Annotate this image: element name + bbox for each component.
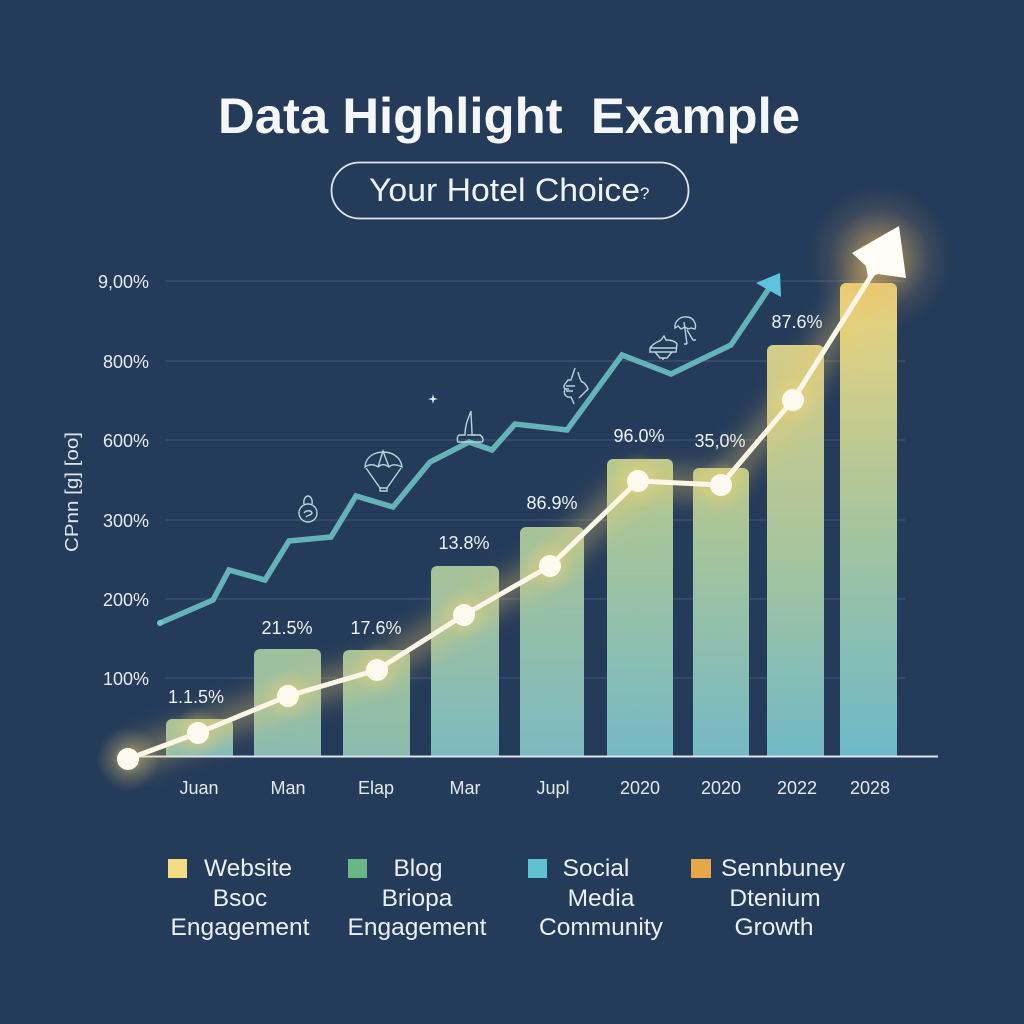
data points bbox=[117, 389, 804, 770]
legend: blog: Briopa bbox=[382, 885, 453, 912]
legend: website: Engagement bbox=[171, 914, 310, 941]
value labels: 13.8% bbox=[438, 533, 490, 553]
value labels: 96.0% bbox=[613, 426, 665, 446]
icon: rocket bbox=[457, 411, 483, 442]
teal line with arrow bbox=[157, 273, 781, 626]
icon: money bag bbox=[299, 496, 317, 522]
value labels bbox=[168, 312, 823, 707]
bar 5 bbox=[520, 527, 584, 756]
white growth line with arrow bbox=[128, 226, 906, 759]
line icons bbox=[299, 317, 696, 522]
legend: website bbox=[168, 855, 310, 941]
x axis labels: Mar bbox=[450, 778, 481, 798]
legend: blog bbox=[348, 855, 487, 941]
subtitle pill bbox=[332, 162, 688, 218]
legend: sennbuney: Growth bbox=[735, 914, 813, 941]
x axis labels: Jupl bbox=[536, 778, 570, 798]
x axis labels: 2020 bbox=[620, 778, 660, 798]
x axis labels: Man bbox=[270, 778, 306, 798]
title: Data Highlight Example bbox=[218, 88, 800, 144]
x axis labels: 2022 bbox=[777, 778, 817, 798]
x axis labels: 2020 bbox=[701, 778, 741, 798]
y axis labels: 600% bbox=[103, 431, 149, 451]
value labels: 1.1.5% bbox=[168, 687, 224, 707]
y axis labels: 800% bbox=[103, 352, 149, 372]
legend: website: Website bbox=[204, 855, 292, 882]
value labels: 35,0% bbox=[694, 431, 746, 451]
y axis labels: 200% bbox=[103, 590, 149, 610]
value labels: 17.6% bbox=[350, 618, 402, 638]
legend: sennbuney: Dtenium bbox=[729, 885, 821, 912]
legend: social: Community bbox=[539, 914, 664, 941]
icon: sparkle bbox=[428, 394, 438, 404]
icon: tree bbox=[564, 368, 588, 404]
icon: umbrella bbox=[675, 317, 696, 344]
value labels: 87.6% bbox=[771, 312, 823, 332]
white growth line glow bbox=[128, 262, 880, 759]
x axis labels bbox=[179, 778, 890, 798]
bar 7 bbox=[693, 468, 749, 756]
icon: parachute bbox=[365, 451, 402, 491]
legend: blog: Engagement bbox=[348, 914, 487, 941]
legend: blog: Blog bbox=[393, 855, 443, 882]
bar 2 bbox=[254, 649, 321, 756]
bar 1 bbox=[166, 719, 233, 756]
bar 6 bbox=[607, 459, 673, 756]
y axis labels bbox=[98, 272, 149, 689]
y axis title: CPnn [g] [oo] bbox=[62, 432, 82, 552]
legend: sennbuney bbox=[691, 855, 846, 941]
x axis baseline bbox=[128, 756, 938, 758]
icon: hat bbox=[650, 336, 677, 360]
legend: sennbuney: Sennbuney bbox=[721, 855, 846, 882]
dot glows bbox=[96, 374, 819, 791]
value labels: 21.5% bbox=[261, 618, 313, 638]
legend: website: Bsoc bbox=[213, 885, 267, 912]
bars bbox=[166, 283, 897, 756]
x axis labels: Elap bbox=[358, 778, 394, 798]
legend: social: Social bbox=[563, 855, 629, 882]
bar 8 bbox=[767, 345, 824, 756]
horizontal grid lines bbox=[165, 281, 905, 678]
y axis labels: 300% bbox=[103, 511, 149, 531]
x axis labels: Juan bbox=[179, 778, 219, 798]
x axis labels: 2028 bbox=[850, 778, 890, 798]
value labels: 86.9% bbox=[526, 493, 578, 513]
y axis labels: 100% bbox=[103, 669, 149, 689]
legend bbox=[168, 855, 846, 941]
bar 4 bbox=[431, 566, 499, 756]
subtitle pill: ? bbox=[640, 184, 649, 203]
legend: social bbox=[528, 855, 664, 941]
bar 9 bbox=[840, 283, 897, 756]
subtitle pill: Your Hotel Choice bbox=[369, 172, 640, 208]
legend: social: Media bbox=[568, 885, 635, 912]
arrow glow bbox=[808, 186, 952, 330]
y axis labels: 9,00% bbox=[98, 272, 149, 292]
bar 3 bbox=[343, 650, 410, 756]
